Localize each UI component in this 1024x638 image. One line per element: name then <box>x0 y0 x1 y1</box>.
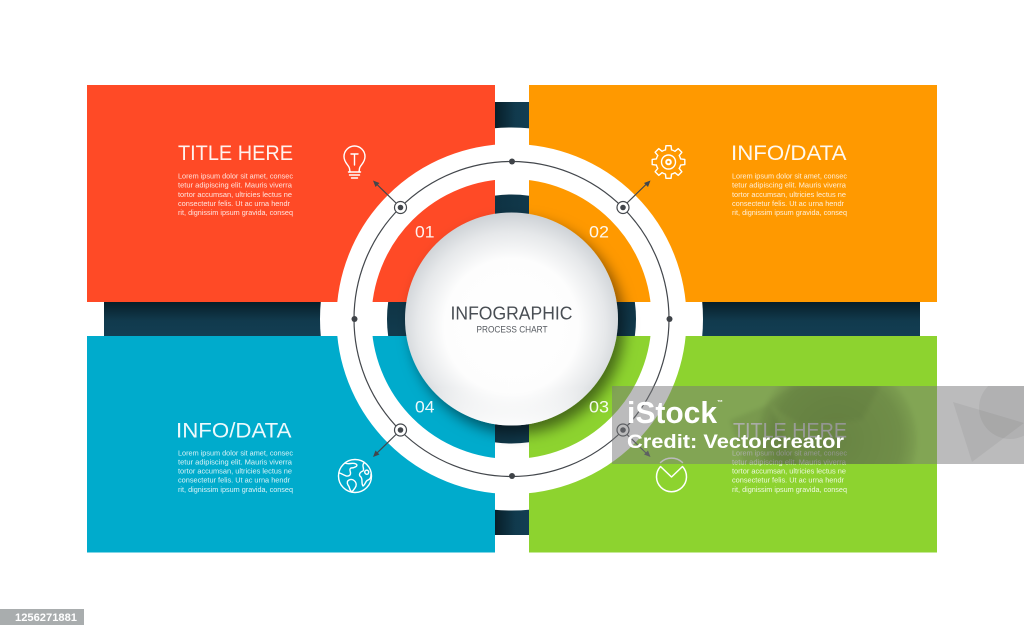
icon: pie chart <box>657 458 687 492</box>
central circle <box>405 212 618 426</box>
text block: title here red: tetur adipiscing elit. Mauris viverra <box>178 181 293 190</box>
watermark logo text <box>627 395 844 453</box>
orbit dots <box>352 158 672 479</box>
text block: title here red <box>178 142 293 217</box>
thin orbit line <box>354 162 669 476</box>
step numbers: 03 <box>589 398 609 416</box>
image id tag <box>0 609 84 625</box>
text block: title here green: rit, dignissim ipsum gravida, conseq <box>732 485 847 494</box>
image id tag: 1256271881 <box>15 612 77 624</box>
arrow: step 01 <box>373 180 406 214</box>
icon: gear <box>652 146 685 178</box>
central heading: PROCESS CHART <box>476 324 548 336</box>
dark inner hub <box>387 194 636 444</box>
text block: title here green: tetur adipiscing elit. Mauris viverra <box>732 458 847 466</box>
text block: info data orange: tetur adipiscing elit. Mauris viverra <box>732 181 847 190</box>
panel: orange top right <box>529 85 937 302</box>
text block: title here red: rit, dignissim ipsum gravida, conseq <box>178 208 293 217</box>
watermark logo text: ™ <box>717 399 723 406</box>
text block: info data orange: INFO/DATA <box>731 142 846 165</box>
text block: title here green: consectetur felis. Ut ac urna hendr <box>732 476 844 485</box>
central heading: INFOGRAPHIC <box>450 304 572 324</box>
dark connector cross <box>104 102 920 535</box>
step numbers <box>415 224 609 416</box>
text block: info data orange: tortor accumsan, ultricies lectus ne <box>732 190 846 199</box>
text block: info data orange: Lorem ipsum dolor sit amet, consec <box>732 172 847 180</box>
text block: info data blue: consectetur felis. Ut ac urna hendr <box>178 476 290 485</box>
white hub disc behind panels <box>320 128 703 510</box>
icon: light bulb <box>344 146 365 178</box>
panel: red top left <box>87 85 495 302</box>
step numbers: 04 <box>415 398 434 416</box>
step numbers: 02 <box>589 224 609 242</box>
text block: info data orange: consectetur felis. Ut ac urna hendr <box>732 199 844 208</box>
arrow: step 02 <box>617 180 650 214</box>
watermark logo text: iStock <box>627 395 718 430</box>
arrow: step 03 <box>617 424 650 457</box>
panel: blue bottom left <box>87 336 495 552</box>
step numbers: 01 <box>415 224 434 242</box>
text block: title here red: tortor accumsan, ultricies lectus ne <box>178 190 292 199</box>
watermark band <box>612 386 1024 464</box>
text block: info data blue: tetur adipiscing elit. Mauris viverra <box>178 458 293 466</box>
arrow: step 04 <box>373 424 406 457</box>
text block: title here red: consectetur felis. Ut ac urna hendr <box>178 199 290 208</box>
text block: info data orange <box>731 142 847 217</box>
text block: title here green: TITLE HERE <box>733 420 847 442</box>
panel: green bottom right <box>529 336 937 552</box>
text block: info data blue: rit, dignissim ipsum gravida, conseq <box>178 485 293 494</box>
watermark logo text: Credit: Vectorcreator <box>627 431 844 453</box>
text block: title here green: Lorem ipsum dolor sit amet, consec <box>732 448 847 457</box>
text block: info data blue: INFO/DATA <box>176 420 292 442</box>
text block: title here red: TITLE HERE <box>178 142 293 165</box>
icon: globe <box>338 460 372 492</box>
text block: info data blue <box>176 420 293 494</box>
central heading <box>450 304 572 336</box>
text block: info data blue: Lorem ipsum dolor sit amet, consec <box>178 448 293 457</box>
text block: info data blue: tortor accumsan, ultricies lectus ne <box>178 467 292 476</box>
text block: title here red: Lorem ipsum dolor sit amet, consec <box>178 172 293 180</box>
white ring <box>354 162 669 476</box>
text block: title here green: tortor accumsan, ultricies lectus ne <box>732 467 846 476</box>
text block: info data orange: rit, dignissim ipsum gravida, conseq <box>732 208 847 217</box>
text block: title here green <box>732 420 847 494</box>
